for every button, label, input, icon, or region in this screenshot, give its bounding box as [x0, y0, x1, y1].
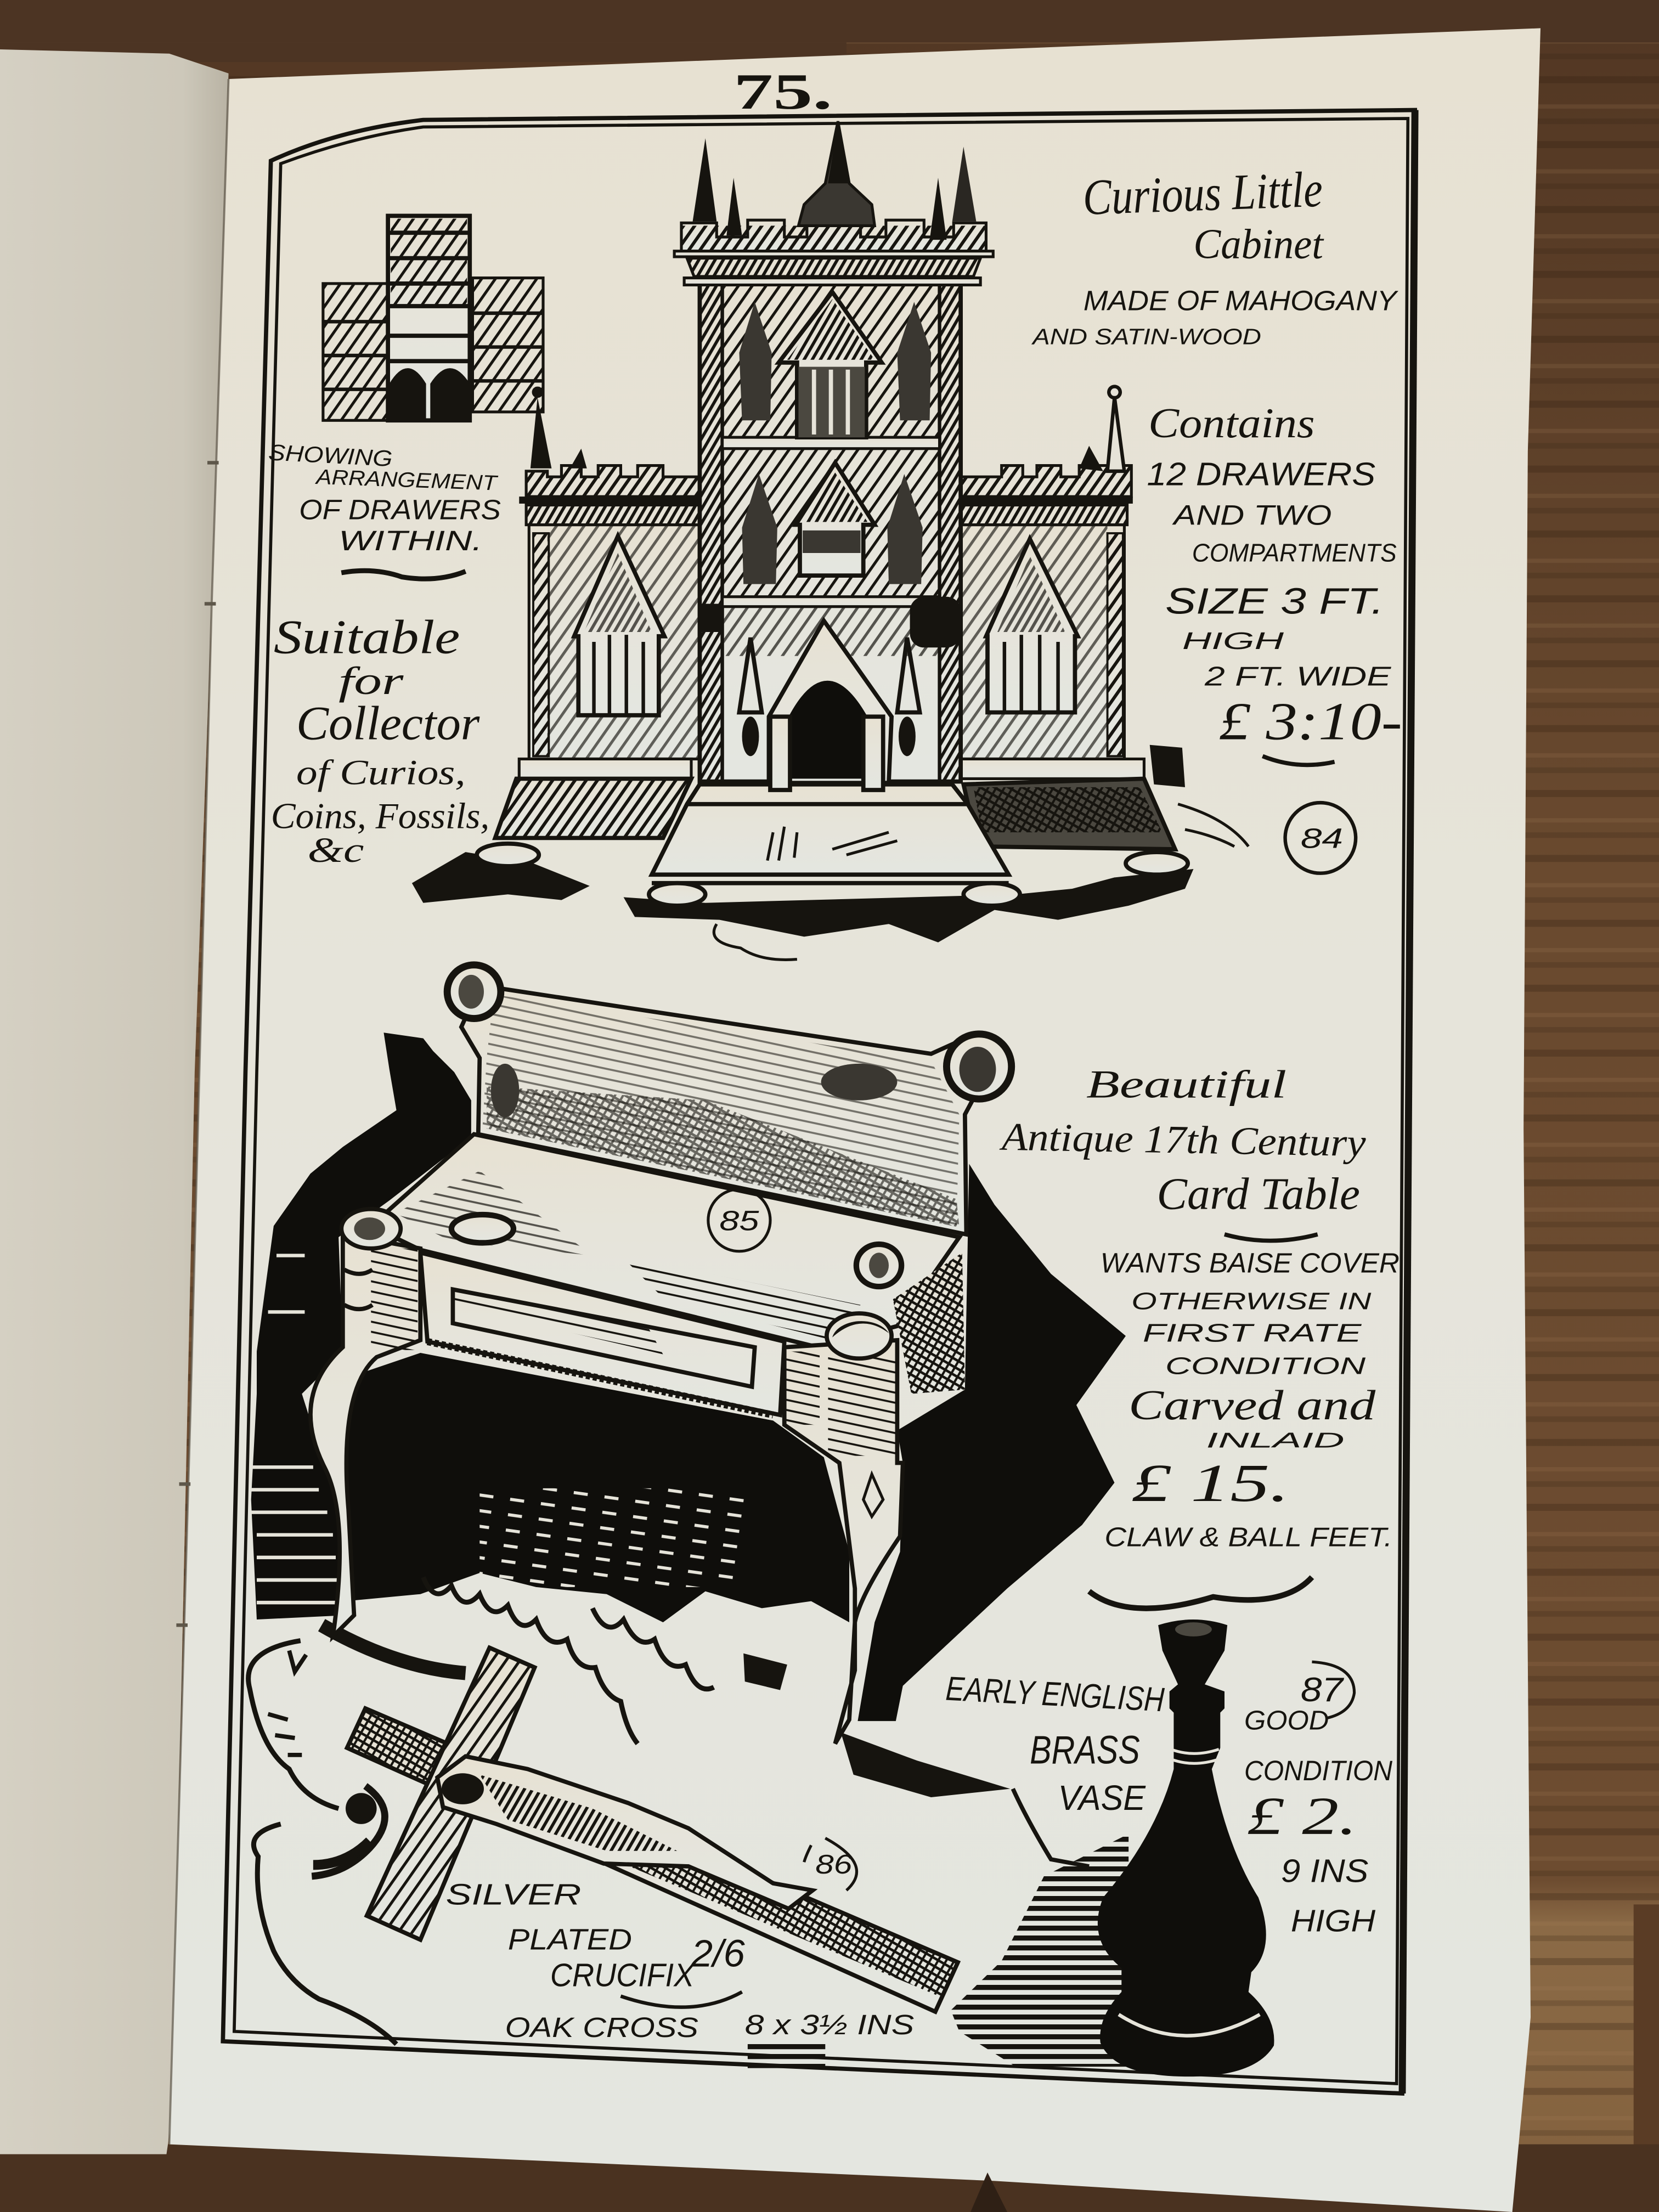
caption: antique card table: OTHERWISE IN — [1131, 1288, 1372, 1314]
caption: showing arrangement of drawers: SHOWING — [268, 439, 393, 471]
cross long beam — [347, 1708, 958, 2012]
caption: early English brass vase: VASE — [1058, 1778, 1146, 1818]
caption: early English brass vase: BRASS — [1030, 1728, 1140, 1772]
illustration: crucifix 86: 86 — [815, 1850, 853, 1880]
page number: 75. — [733, 64, 832, 120]
table black shadow, left — [251, 1032, 471, 1620]
cabinet base steps — [519, 759, 691, 778]
illustration: brass vase 87 — [841, 1620, 1355, 2076]
diagram: arrangement of drawers — [323, 216, 543, 420]
caption: silver plated crucifix — [446, 1878, 914, 2068]
caption: curious little cabinet: Curious Little — [1082, 162, 1323, 226]
table foot trail and line — [841, 1733, 1010, 1797]
caption: antique card table: Beautiful — [1086, 1063, 1286, 1107]
caption: antique card table: Antique 17th Century — [999, 1115, 1366, 1165]
caption: suitable for collector: Collector — [296, 696, 480, 749]
cross upright beam — [367, 1647, 535, 1940]
caption: antique card table — [999, 1063, 1400, 1609]
wing cornices and battlements — [526, 466, 699, 496]
caption: antique card table: WANTS BAISE COVER — [1101, 1246, 1400, 1278]
caption: showing arrangement of drawers: OF DRAWERS — [299, 493, 501, 525]
caption: early English brass vase: HIGH — [1291, 1903, 1375, 1938]
caption: curious little cabinet: Contains — [1148, 399, 1315, 447]
illustration: Gothic cabinet 84 — [412, 121, 1249, 960]
caption: suitable for collector: of Curios, — [296, 753, 466, 792]
caption: early English brass vase: EARLY ENGLISH — [945, 1670, 1165, 1719]
caption: curious little cabinet: AND TWO — [1172, 499, 1331, 531]
caption: early English brass vase: 9 INS — [1281, 1852, 1368, 1889]
caption: suitable for collector: Suitable — [274, 611, 460, 664]
caption: antique card table: CONDITION — [1165, 1353, 1366, 1380]
vase body — [1098, 1620, 1274, 2076]
table black shadow, right — [857, 1164, 1126, 1721]
binding staples and gutter — [170, 79, 229, 2145]
caption: silver plated crucifix: OAK CROSS — [505, 2011, 698, 2043]
caption: early English brass vase: GOOD — [1244, 1706, 1329, 1736]
cabinet wings — [529, 525, 699, 759]
caption: curious little cabinet: SIZE 3 FT. — [1165, 581, 1384, 622]
wavy floor strokes — [423, 1577, 714, 1743]
table left leg — [311, 1234, 420, 1637]
caption: curious little cabinet: HIGH — [1182, 628, 1284, 654]
table top — [371, 1134, 960, 1347]
caption: curious little cabinet: MADE OF MAHOGANY — [1084, 285, 1399, 317]
decorative scrolls — [249, 1641, 338, 1809]
caption: curious little cabinet: 2 FT. WIDE — [1204, 662, 1392, 692]
caption: suitable for collector: for — [338, 659, 404, 703]
tower cornice and crown — [674, 121, 993, 285]
torn notch at bottom of page — [970, 2172, 1007, 2212]
table right leg — [785, 1340, 903, 1743]
item number 87 — [1312, 1662, 1355, 1718]
tower middle panels — [795, 462, 874, 575]
left page — [0, 49, 229, 2154]
item number 86 — [804, 1838, 857, 1891]
cabinet tower — [699, 279, 961, 782]
caption: curious little cabinet: £ 3:10- — [1219, 692, 1402, 751]
caption: silver plated crucifix: 8 x 3½ INS — [745, 2008, 914, 2040]
caption: curious little cabinet: AND SATIN-WOOD — [1031, 324, 1261, 349]
cabinet ground shadow — [412, 745, 1249, 960]
caption: silver plated crucifix: 2/6 — [691, 1932, 745, 1975]
caption: early English brass vase — [945, 1670, 1393, 1938]
caption: early English brass vase: CONDITION — [1244, 1754, 1393, 1786]
right wing window — [986, 539, 1078, 713]
under-table black shadow — [346, 1353, 849, 1622]
illustration: card table 85: 85 — [719, 1204, 759, 1236]
caption: curious little cabinet — [1031, 162, 1402, 873]
horizontal hatching on left shadow — [251, 1256, 338, 1602]
double page frame — [223, 110, 1415, 2094]
caption: early English brass vase: £ 2. — [1247, 1787, 1357, 1846]
illustration: crucifix 86 — [249, 1641, 958, 2044]
caption: antique card table: FIRST RATE — [1143, 1318, 1362, 1347]
caption: showing arrangement of drawers — [268, 439, 501, 579]
caption: antique card table: £ 15. — [1131, 1454, 1289, 1513]
caption: antique card table: Carved and — [1128, 1381, 1376, 1429]
caption: silver plated crucifix: CRUCIFIX — [550, 1957, 696, 1994]
caption: showing arrangement of drawers: WITHIN. — [338, 524, 482, 556]
figure on the cross — [437, 1756, 812, 1909]
item number 85 — [708, 1189, 770, 1251]
caption: antique card table: CLAW & BALL FEET. — [1104, 1522, 1392, 1552]
left wing window — [574, 536, 664, 715]
caption: antique card table: INLAID — [1206, 1429, 1345, 1452]
caption: suitable for collector: Coins, Fossils, — [271, 795, 489, 836]
tower upper window — [778, 292, 882, 437]
caption: silver plated crucifix: PLATED — [508, 1923, 632, 1956]
spires on wings — [531, 387, 551, 469]
caption: curious little cabinet: 84 — [1301, 822, 1343, 854]
vase hatched shadow — [951, 1834, 1128, 2067]
tower doorway — [769, 620, 891, 783]
caption: suitable for collector: &c — [308, 831, 364, 870]
caption: suitable for collector — [271, 611, 489, 870]
feet of cabinet — [477, 844, 539, 866]
caption: showing arrangement of drawers: ARRANGEMENT — [314, 465, 499, 495]
illustration: brass vase 87: 87 — [1301, 1671, 1345, 1709]
caption: antique card table: Card Table — [1157, 1169, 1360, 1219]
table apron — [420, 1252, 785, 1415]
caption: curious little cabinet: COMPARTMENTS — [1192, 538, 1397, 567]
table backrest — [461, 988, 976, 1234]
caption: silver plated crucifix: SILVER — [446, 1878, 581, 1911]
hatched side of table — [893, 1252, 965, 1394]
caption: curious little cabinet: 12 DRAWERS — [1147, 456, 1375, 493]
caption: curious little cabinet: Cabinet — [1193, 221, 1324, 268]
illustration: card table 85 — [251, 965, 1126, 1743]
